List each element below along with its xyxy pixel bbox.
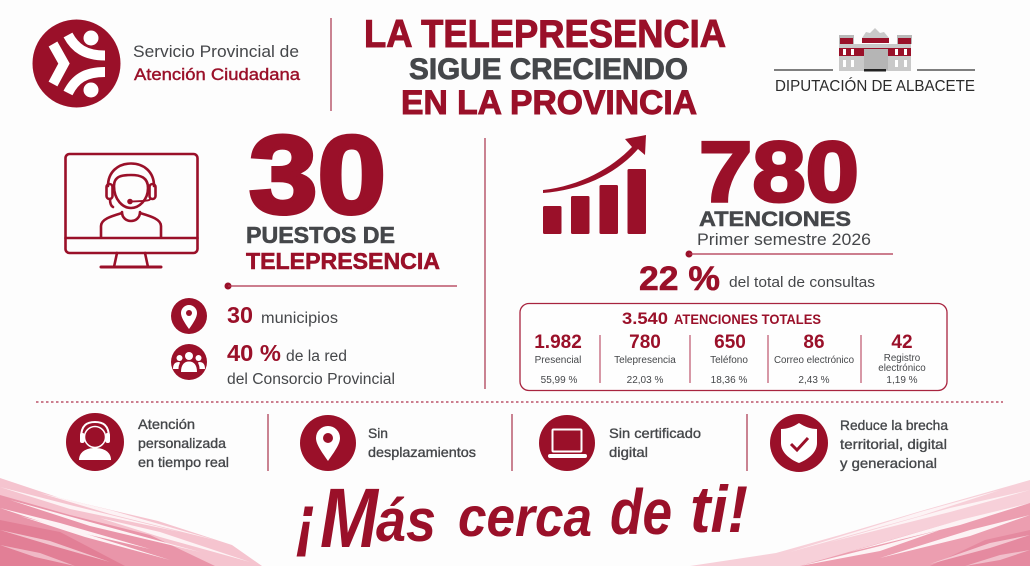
column: telepresencia: 780	[629, 332, 661, 353]
text: territorial, digital	[840, 436, 947, 452]
icon: pin	[300, 415, 356, 471]
text: en tiempo real	[138, 454, 229, 470]
stat: 30 municipios	[227, 302, 338, 328]
stat: 40 % de la red: del Consorcio Provincial	[227, 371, 395, 388]
text	[138, 416, 229, 470]
column: registro electrónico	[878, 332, 926, 386]
text: digital	[609, 444, 648, 460]
text: Sin certificado	[609, 425, 701, 441]
big number 780: 780	[699, 125, 859, 220]
column: telepresencia: 22,03 %	[627, 375, 663, 386]
title: LA TELEPRESENCIA	[364, 13, 726, 56]
icon: agent with headset	[66, 413, 124, 471]
slogan: ti!	[690, 472, 748, 546]
column: correo electrónico	[774, 332, 855, 386]
title	[364, 13, 726, 122]
column: registro electrónico: electrónico	[878, 363, 926, 374]
icon: palace building	[839, 28, 912, 72]
panel: puestos de telepresencia	[66, 114, 457, 388]
column: telepresencia	[614, 332, 676, 386]
benefit: reduce la brecha	[770, 414, 948, 472]
column: teléfono: Teléfono	[710, 355, 748, 366]
icon: location pin	[171, 298, 207, 334]
text: Reduce la brecha	[840, 417, 948, 433]
column: presencial: 1.982	[534, 332, 582, 353]
text: Atención	[138, 416, 195, 432]
table heading	[622, 310, 821, 328]
column: presencial: 55,99 %	[541, 375, 577, 386]
column: teléfono: 650	[714, 332, 746, 353]
subheading: primer semestre 2026: Primer semestre 2026	[697, 231, 871, 249]
column: registro electrónico: Registro	[884, 353, 921, 364]
text: y generacional	[840, 455, 937, 471]
icon: laptop	[539, 415, 595, 471]
column: teléfono: 18,36 %	[711, 375, 747, 386]
benefit: sin desplazamientos	[300, 415, 476, 471]
heading: puestos de telepresencia: TELEPRESENCIA	[246, 248, 440, 274]
stat: 22 % del total de consultas: del total de consultas	[729, 274, 875, 291]
stat: 40 % de la red: de la red	[286, 348, 347, 365]
logo: Servicio Provincial de Atención Ciudadana	[32, 20, 301, 108]
slogan: cerca	[458, 485, 592, 548]
column: registro electrónico: 42	[891, 332, 913, 353]
text: desplazamientos	[368, 444, 476, 460]
text	[840, 417, 948, 471]
heading: puestos de telepresencia: PUESTOS DE	[246, 222, 395, 248]
logo text: DIPUTACIÓN DE ALBACETE	[775, 76, 975, 95]
benefit: sin certificado digital	[539, 415, 701, 471]
stat: 40 % de la red	[227, 340, 395, 388]
slogan: ¡	[296, 481, 316, 561]
column: registro electrónico: 1,19 %	[886, 375, 918, 386]
slogan: de	[610, 476, 672, 548]
text: Sin	[368, 425, 388, 441]
big number 30: 30	[249, 114, 386, 237]
heading: puestos de telepresencia	[246, 222, 440, 274]
stat: 30 municipios: 30	[227, 302, 253, 328]
panel: benefits row	[66, 413, 948, 472]
text	[609, 425, 701, 460]
logo: Diputación de Albacete	[774, 28, 975, 95]
column: teléfono	[710, 332, 748, 386]
column: telepresencia: Telepresencia	[614, 355, 676, 366]
column: correo electrónico: 2,43 %	[798, 375, 830, 386]
column: presencial	[534, 332, 582, 386]
column: presencial: Presencial	[535, 355, 581, 366]
brush stroke: bottom right	[690, 480, 1030, 566]
panel: atenciones totales table	[520, 304, 947, 390]
stat: 40 % de la red: 40 %	[227, 340, 281, 366]
icon: service emblem	[32, 20, 120, 108]
text	[368, 425, 476, 460]
icon: monitor with agent	[66, 154, 198, 267]
column: correo electrónico: 86	[803, 332, 825, 353]
benefit: atención personalizada	[66, 413, 229, 471]
icon: growth bar chart with arrow	[543, 135, 646, 234]
title: EN LA PROVINCIA	[401, 84, 697, 122]
logo text: Atención Ciudadana	[134, 65, 301, 84]
panel: 780 atenciones	[520, 125, 947, 390]
logo text: Servicio Provincial de	[133, 43, 299, 61]
stat: 30 municipios: municipios	[261, 310, 338, 327]
stat: 22 % del total de consultas: 22 %	[639, 260, 720, 298]
icon: people	[171, 344, 207, 380]
slogan	[296, 471, 748, 565]
slogan: M	[320, 471, 380, 565]
heading: atenciones: ATENCIONES	[699, 208, 851, 231]
title: SIGUE CRECIENDO	[409, 53, 688, 86]
icon: shield with check	[770, 414, 828, 472]
brush stroke: bottom left	[0, 478, 262, 566]
logo text	[133, 43, 301, 84]
column: correo electrónico: Correo electrónico	[774, 355, 855, 366]
stat: 22 % del total de consultas	[639, 260, 875, 298]
table heading: 3.540	[622, 310, 668, 328]
slogan: ás	[376, 487, 436, 554]
table heading: ATENCIONES TOTALES	[674, 311, 821, 327]
text: personalizada	[138, 435, 226, 451]
